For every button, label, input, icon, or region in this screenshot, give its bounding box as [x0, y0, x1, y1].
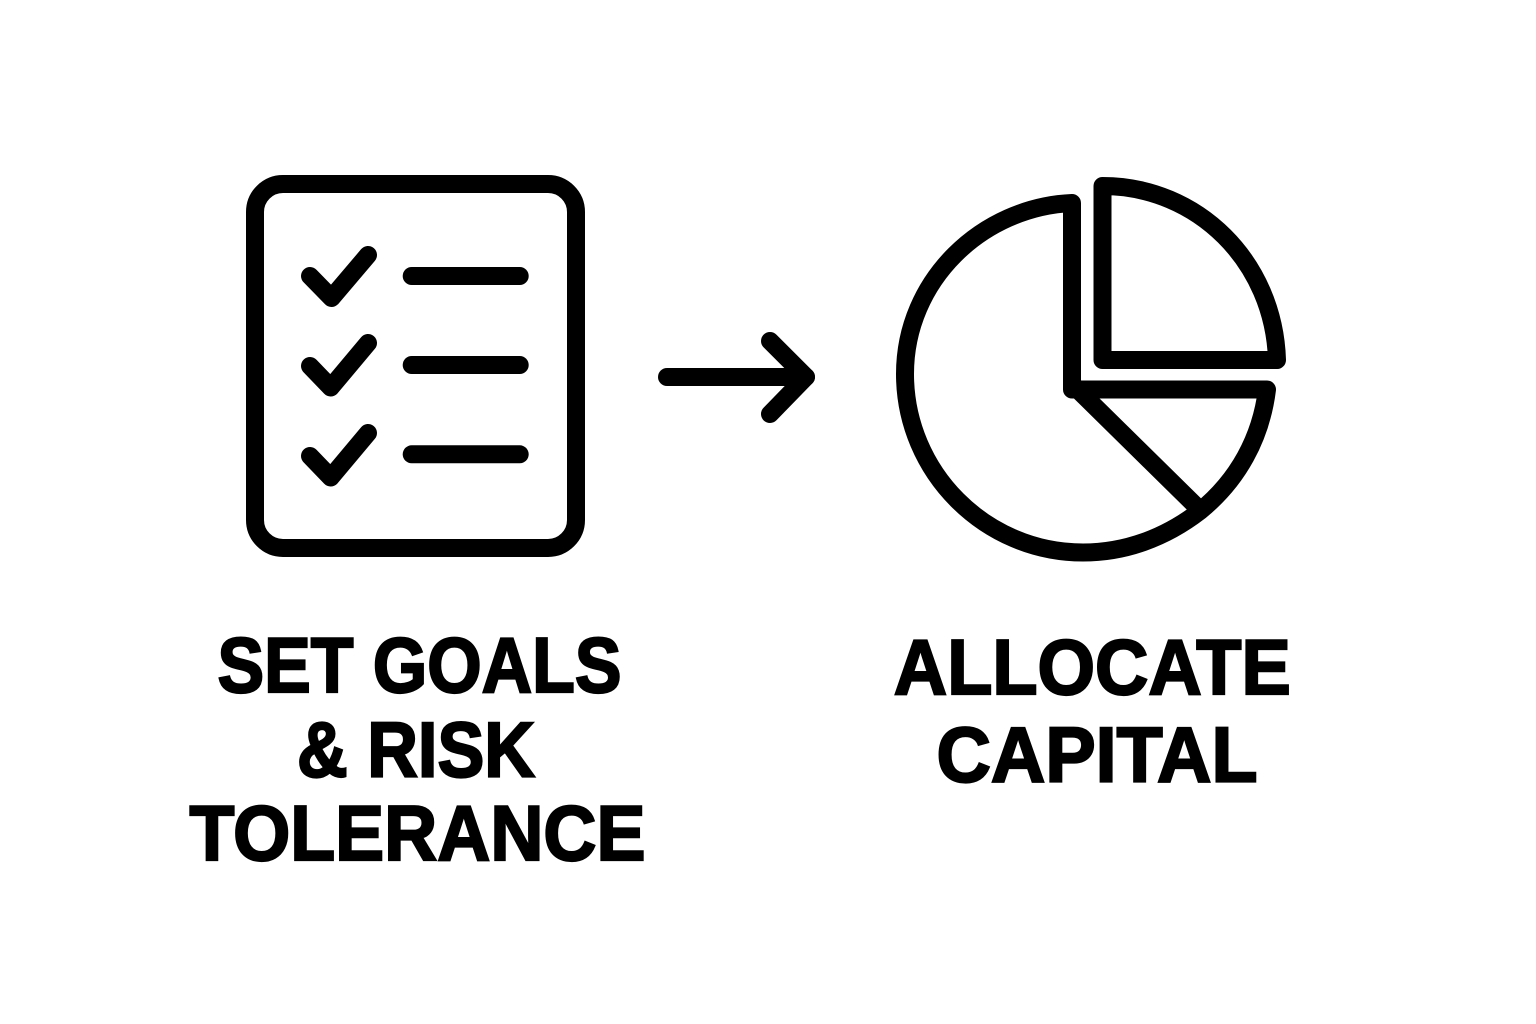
- icon: checklist: [255, 184, 576, 548]
- heading: set goals and risk tolerance: TOLERANCE: [190, 789, 646, 877]
- checklist page outline: [255, 184, 576, 548]
- icon: pie chart: [905, 186, 1277, 552]
- check mark 1: [310, 255, 368, 298]
- heading: allocate capital: ALLOCATE: [894, 623, 1291, 711]
- detached pie slice: [1102, 186, 1277, 360]
- pie divider: [1072, 384, 1197, 507]
- heading: allocate capital: CAPITAL: [936, 710, 1258, 798]
- check mark 2: [310, 343, 368, 388]
- list line 2: [412, 356, 520, 374]
- heading: allocate capital: [894, 623, 1291, 798]
- arrow: [667, 341, 806, 414]
- heading: set goals and risk tolerance: & RISK: [297, 706, 535, 794]
- main pie body: [905, 203, 1267, 552]
- list line 3: [412, 445, 520, 463]
- check mark 3: [310, 433, 368, 478]
- heading: set goals and risk tolerance: [190, 621, 646, 877]
- heading: set goals and risk tolerance: SET GOALS: [218, 621, 622, 709]
- list line 1: [412, 267, 520, 285]
